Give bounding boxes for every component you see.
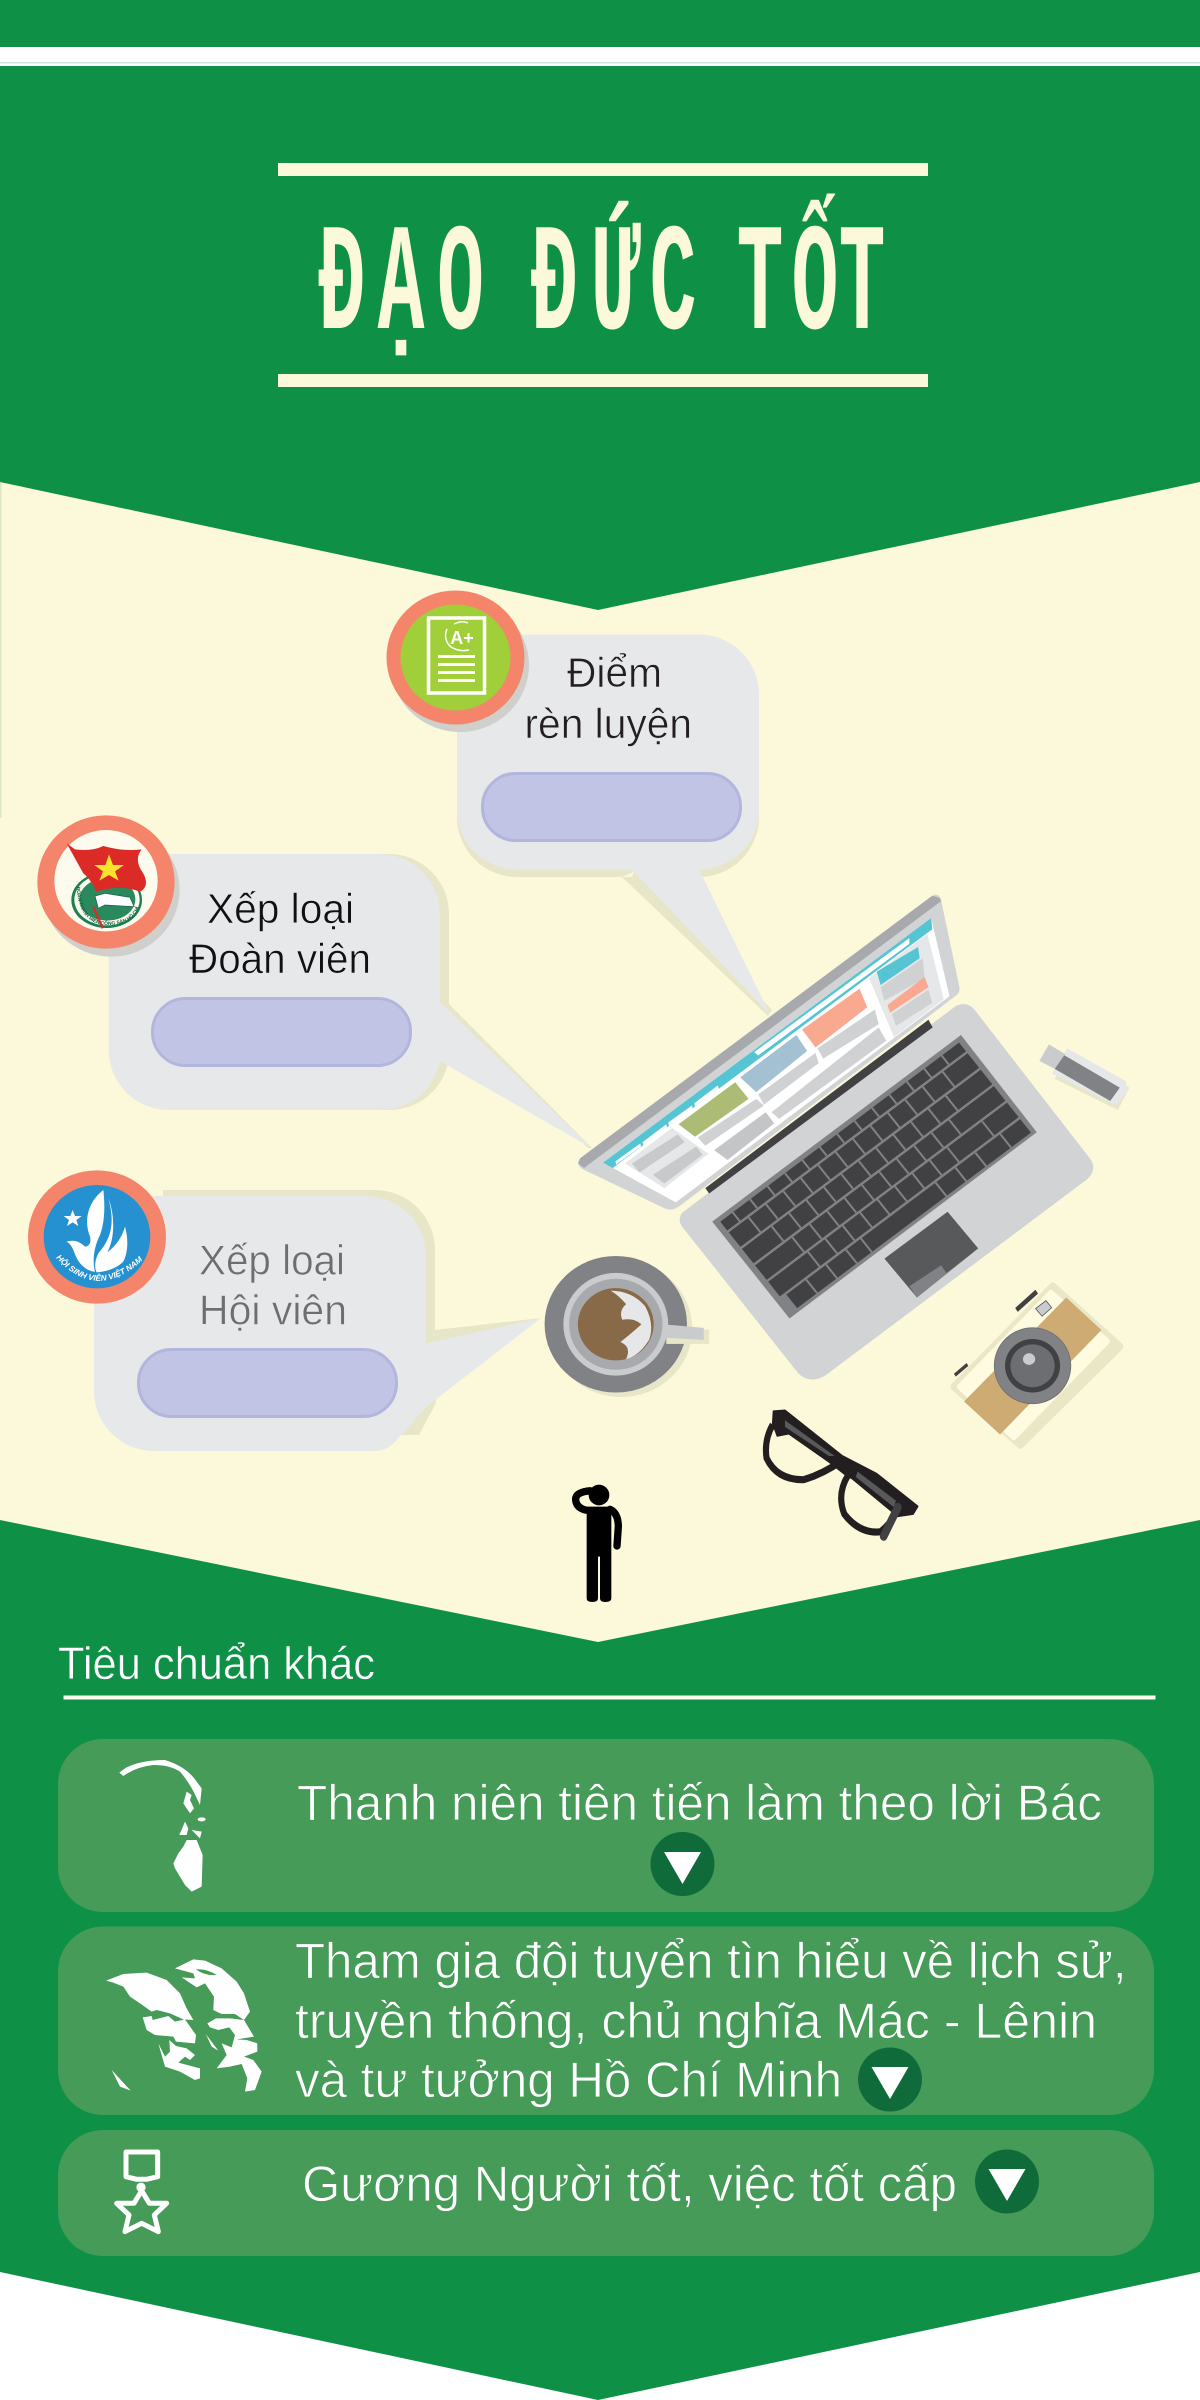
icon: grade report: A+ [450,628,474,648]
illustration: camera [954,1286,1120,1445]
card text: Tham gia đội tuyển tìn hiểu về lịch sử, [295,1933,1126,1989]
title bottom rule [278,374,928,387]
lower chevron panel [0,1520,1200,2400]
icon: student association emblem: HỘI SINH VIÊN VIỆT NAM [56,1254,142,1281]
keyboard [712,1035,1037,1318]
heading: other standards: Tiêu chuẩn khác [58,1638,375,1689]
value pill [138,1350,396,1416]
card text: Gương Người tốt, việc tốt cấp [302,2156,957,2212]
bubble label: Điểm [567,649,662,696]
bubble body [94,1196,541,1451]
icon: youth union emblem [37,815,180,956]
bubble shadow [457,642,772,1016]
card text [295,1933,1126,2108]
laptop screen [603,918,949,1202]
illustration: person icon [576,1485,618,1602]
bubble label: rèn luyện [524,700,692,747]
card text: truyền thống, chủ nghĩa Mác - Lênin [295,1993,1097,2049]
illustration: glasses [766,1410,918,1536]
value pill [152,998,410,1066]
header chevron panel [0,66,1200,610]
expand button [975,2150,1039,2214]
panel: speech bubble Xếp loại Hội viên [94,1190,541,1451]
laptop lid [578,895,960,1210]
title top rule [278,163,928,176]
value pill [482,774,740,840]
card text: Thanh niên tiên tiến làm theo lời Bác [297,1775,1102,1831]
bubble label [199,1237,347,1334]
expand button [858,2048,922,2112]
title block [278,163,928,387]
illustration: laptop [578,895,1093,1380]
laptop base [680,1004,1093,1380]
top green band [0,0,1200,47]
card text: và tư tưởng Hồ Chí Minh [295,2052,842,2108]
illustration: USB drive [1039,1044,1129,1110]
trackpad [884,1212,978,1297]
bubble body [457,634,770,1014]
bubble label: Xếp loại [207,885,354,932]
hinge [705,1020,933,1193]
icon: medal [117,2152,167,2232]
heading: other standards [58,1638,1156,1700]
panel: speech bubble Điểm rèn luyện [457,634,772,1016]
bubble shadow [170,854,592,1148]
icon: student association emblem [28,1170,166,1304]
icon: grade report [386,590,529,732]
panel: card 2 [58,1926,1154,2115]
bubble label [524,649,692,747]
bubble label: Đoàn viên [189,935,371,982]
panel: card 3 [58,2130,1154,2256]
bubble shadow [163,1190,541,1435]
bubble body [109,854,592,1148]
bubble label: Hội viên [199,1287,347,1334]
icon: youth union emblem: ĐOÀN THANH NIÊN CỘNG SẢN HỒ CHÍ MINH [76,886,139,926]
panel: speech bubble Xếp loại Đoàn viên [109,854,592,1148]
icon: Ho Chi Minh portrait [119,1760,206,1892]
bubble label [189,885,371,982]
title: ĐẠOĐỨCTỐT [318,194,885,375]
illustration: coffee cup [545,1256,709,1397]
expand button [650,1832,714,1896]
panel: card 1 [58,1739,1154,1912]
bubble label: Xếp loại [199,1237,345,1284]
icon: Lenin and Marx portraits [106,1959,262,2092]
